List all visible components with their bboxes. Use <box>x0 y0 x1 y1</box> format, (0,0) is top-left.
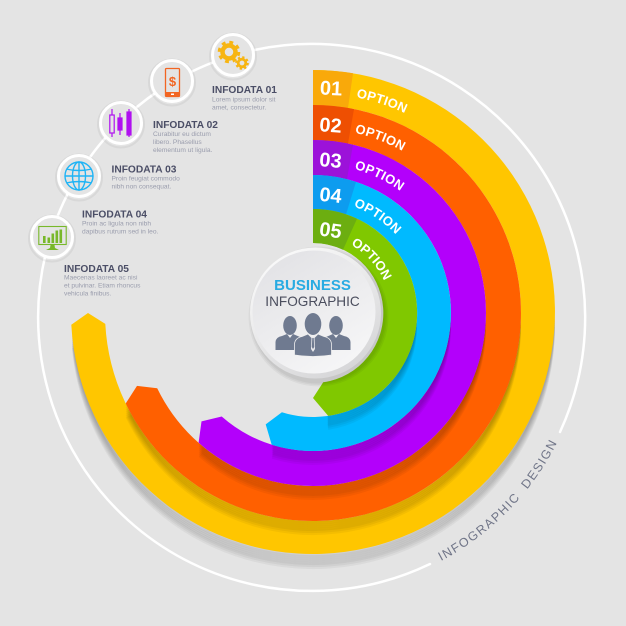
option 01: OPTION <box>358 89 408 113</box>
icon ring 03 <box>98 102 144 148</box>
icon: globe <box>65 162 93 190</box>
info text 04: dapibus rutrum sed in leo. <box>82 228 159 236</box>
option 04: OPTION <box>355 199 402 234</box>
band numbers and option labels <box>318 77 408 280</box>
info text 03: Proin feugiat commodo <box>112 176 180 182</box>
info text 02: elementum ut ligula. <box>153 147 213 154</box>
icon: phone: $ <box>169 74 177 89</box>
option 03: OPTION <box>356 161 405 190</box>
info text 04 <box>82 210 159 236</box>
icon: gears <box>219 42 248 69</box>
info text 04: INFODATA 04 <box>82 210 147 220</box>
band 02 orange <box>126 105 521 532</box>
band 04 blue <box>266 175 451 462</box>
info text 02: INFODATA 02 <box>153 120 218 131</box>
curved label: infographic design: INFOGRAPHIC DESIGN <box>438 440 556 560</box>
info text 03 <box>112 164 180 190</box>
info text 02: Curabitur eu dictum <box>153 131 211 138</box>
option 02: OPTION <box>356 124 406 150</box>
number 03: 03 <box>318 149 343 173</box>
info text 05: INFODATA 05 <box>64 264 129 275</box>
step 02: phone <box>149 60 218 154</box>
step 03: candlesticks <box>98 102 180 190</box>
icon ring 04 <box>56 154 102 200</box>
number 05: 05 <box>318 218 343 243</box>
center subtitle: INFOGRAPHIC <box>265 294 360 309</box>
band 03 purple <box>199 140 486 497</box>
icon: bar chart monitor <box>39 226 66 250</box>
info text 01 <box>212 85 277 112</box>
step 05: monitor chart <box>29 216 141 298</box>
icon: business people <box>276 313 350 356</box>
info text 03: nibh non consequat. <box>112 184 171 190</box>
center badge <box>248 246 388 386</box>
info text 05: vehicula finibus. <box>64 290 111 298</box>
number 01: 01 <box>319 77 343 101</box>
outer ring <box>38 44 585 591</box>
icon ring 02 <box>149 60 195 106</box>
step 04: globe <box>56 154 159 236</box>
info text 01: Lorem ipsum dolor sit <box>212 96 276 104</box>
info text 01: INFODATA 01 <box>212 85 277 96</box>
step 01: gears <box>210 34 277 112</box>
band 01 yellow <box>71 70 555 566</box>
info text 03: INFODATA 03 <box>112 164 177 176</box>
info text 04: Proin ac ligula non nibh <box>82 220 151 228</box>
info text 05: et pulvinar. Etiam rhoncus <box>64 282 141 290</box>
info text 01: amet, consectetur. <box>212 104 266 112</box>
info text 05: Maecenas laoreet ac nisi <box>64 274 138 282</box>
info text 05 <box>64 264 141 298</box>
number 04: 04 <box>318 184 344 208</box>
icon: candlestick chart <box>110 109 131 137</box>
center title: BUSINESS <box>274 277 351 294</box>
band 05 green <box>313 209 417 427</box>
number 02: 02 <box>319 114 342 138</box>
icon ring 05 <box>29 216 75 262</box>
icon ring 01 <box>210 34 256 80</box>
info text 02 <box>153 120 218 154</box>
info text 02: libero. Phasellus <box>153 139 202 146</box>
option 05: OPTION <box>352 238 392 280</box>
